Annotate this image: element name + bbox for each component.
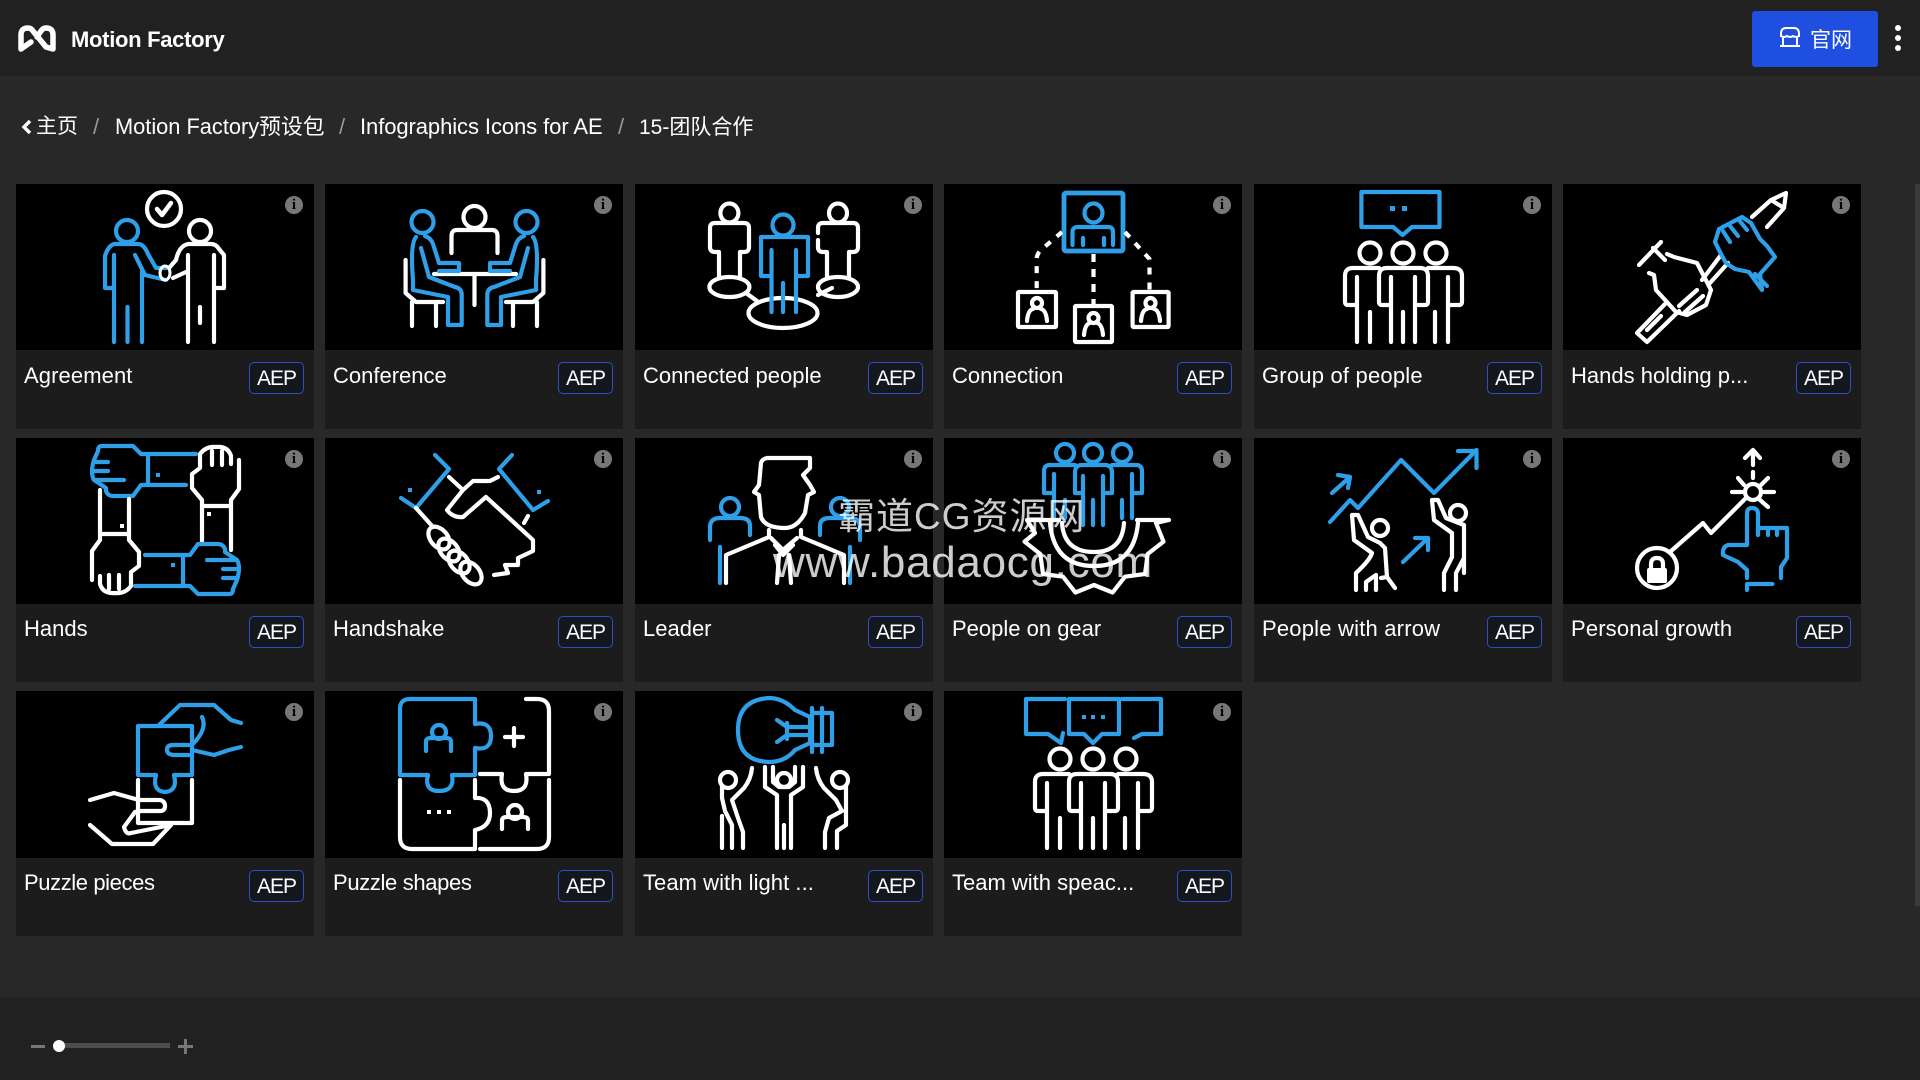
breadcrumb item: preset pack: Motion Factory预设包 [115,114,325,139]
icon: handshake [398,452,550,586]
info icon: i [1220,197,1224,213]
panel: People on gear [944,438,1242,682]
slider track [59,1043,170,1048]
info icon: i [911,451,915,467]
format badge [1796,616,1851,648]
card title: Team with speac... [952,870,1134,895]
icon: hands [90,444,242,596]
format badge: AEP [1495,367,1534,390]
info icon: i [1839,197,1843,213]
format badge [1487,362,1542,394]
card title: Hands holding p... [1571,363,1748,388]
breadcrumb: / [339,114,345,139]
icon: hands holding pencil [1634,190,1788,344]
panel: Puzzle shapes [325,691,622,936]
icon: personal growth [1634,448,1790,592]
watermark [772,496,1153,587]
breadcrumb item: current: 15-团队合作 [639,116,753,139]
format badge [558,870,613,902]
info icon: i [292,704,296,720]
card title: Team with light ... [643,870,814,895]
info icon: i [601,197,605,213]
format badge [1177,362,1232,394]
panel: Personal growth [1563,438,1860,682]
icon: store [1780,27,1800,47]
brand name: Motion Factory [71,27,224,52]
top header bar [0,0,1920,76]
card title: Personal growth [1571,616,1732,641]
format badge: AEP [257,367,296,390]
icon: puzzle pieces [88,702,244,846]
icon: zoom out [31,1045,45,1048]
panel: Conference [325,184,622,429]
card title: People on gear [952,616,1101,641]
info icon: i [1839,451,1843,467]
icon: Motion Factory logo [18,25,56,52]
format badge [1487,616,1542,648]
panel: Group of people [1254,184,1552,429]
panel: Agreement [16,184,314,429]
panel: Team with speech bubbles [944,691,1242,936]
info icon [1832,196,1850,214]
card title: Hands [24,616,88,641]
icon: people on gear [1022,442,1172,595]
card title: Connection [952,363,1063,388]
info icon: i [911,197,915,213]
icon: conference [404,204,546,328]
icon: back chevron [22,120,32,134]
breadcrumb: / [93,114,99,139]
icon: agreement [102,190,226,344]
breadcrumb item: infographics: Infographics Icons for AE [360,114,603,139]
info icon: i [292,197,296,213]
info icon: i [1530,451,1534,467]
card title: Puzzle pieces [24,870,155,895]
watermark: site name: 霸道CG资源网 [838,496,1086,537]
format badge: AEP [566,621,605,644]
icon: people with arrow [1328,448,1479,592]
format badge [558,616,613,648]
panel: Hands [16,438,314,682]
info icon [285,703,303,721]
info icon: i [601,451,605,467]
info icon [1523,450,1541,468]
format badge [1177,870,1232,902]
panel: Connection [944,184,1242,429]
footer bar with zoom slider [0,997,1920,1080]
icon: zoom in [178,1039,193,1054]
panel: Team with light bulb [635,691,932,936]
icon: team with speech bubbles [1024,696,1164,850]
info icon: i [292,451,296,467]
panel: People with arrow [1254,438,1552,682]
info icon [1213,196,1231,214]
panel: Leader [635,438,932,682]
format badge [868,362,923,394]
card title: Connected people [643,363,822,388]
info icon: i [601,704,605,720]
card title: Group of people [1262,363,1423,388]
panel: Connected people [635,184,932,429]
panel: Hands holding pencil [1563,184,1860,429]
format badge [1796,362,1851,394]
icon: more menu [1895,25,1901,51]
card title: Handshake [333,616,444,641]
card title: Conference [333,363,447,388]
format badge: AEP [1185,367,1224,390]
format badge: AEP [566,367,605,390]
info icon [904,196,922,214]
format badge: AEP [257,875,296,898]
icon: team with light bulb [718,696,850,850]
format badge [249,362,304,394]
scrollbar [1915,184,1920,906]
info icon: i [1220,704,1224,720]
panel: Puzzle pieces [16,691,314,936]
format badge: AEP [1185,875,1224,898]
format badge: AEP [1495,621,1534,644]
format badge: AEP [1185,621,1224,644]
breadcrumb item: home: 主页 [36,115,78,138]
icon: connection [1016,190,1171,344]
info icon [904,450,922,468]
icon: group of people [1342,190,1464,344]
format badge: AEP [257,621,296,644]
info icon: i [1530,197,1534,213]
format badge: AEP [876,621,915,644]
info icon [904,703,922,721]
format badge [249,870,304,902]
info icon [594,196,612,214]
format badge [558,362,613,394]
info icon: i [911,704,915,720]
info icon [285,196,303,214]
breadcrumb: / [618,114,624,139]
info icon [1523,196,1541,214]
format badge: AEP [876,367,915,390]
info icon [1213,450,1231,468]
watermark: url: www.badaocg.com [773,538,1153,587]
button label: 官网 [1810,29,1852,52]
slider thumb [53,1040,65,1052]
panel: Handshake [325,438,622,682]
info icon [1213,703,1231,721]
breadcrumb [22,114,753,139]
info icon [1832,450,1850,468]
format badge: AEP [1804,367,1843,390]
format badge [1177,616,1232,648]
info icon [594,450,612,468]
icon: leader [708,456,862,586]
info icon [285,450,303,468]
icon: connected people [707,201,860,330]
card title: Leader [643,616,712,641]
format badge [868,870,923,902]
card title: People with arrow [1262,616,1440,641]
info icon: i [1220,451,1224,467]
format badge: AEP [566,875,605,898]
card title: Agreement [24,363,133,388]
info icon [594,703,612,721]
button: official site [1752,11,1878,67]
icon: puzzle shapes [398,696,552,852]
format badge: AEP [876,875,915,898]
format badge: AEP [1804,621,1843,644]
format badge [249,616,304,648]
format badge [868,616,923,648]
card title: Puzzle shapes [333,870,472,895]
